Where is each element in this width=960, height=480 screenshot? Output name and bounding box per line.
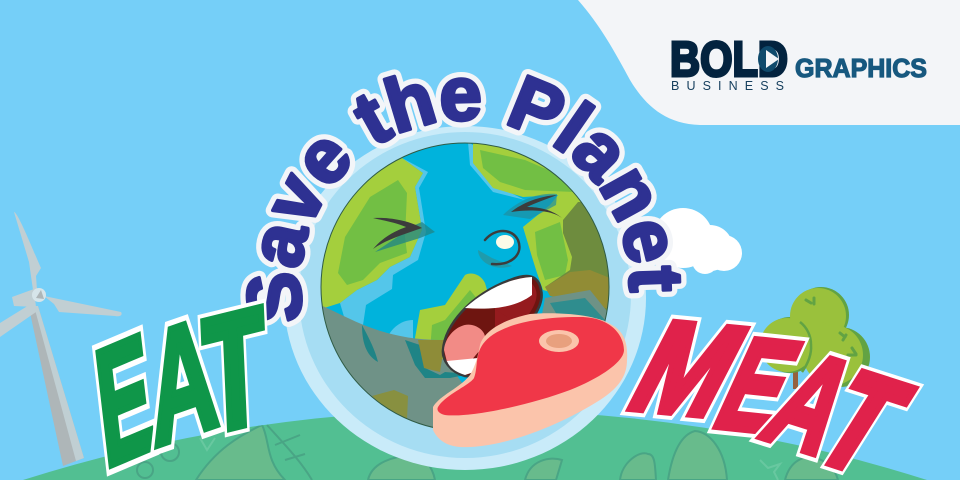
- wind turbine: [0, 212, 122, 466]
- logo: [670, 33, 927, 93]
- letter E: E: [697, 312, 819, 459]
- turbine tower: [29, 306, 84, 466]
- tongue: [444, 325, 485, 362]
- steak: [433, 313, 627, 447]
- curved title: Save the Planet: [240, 69, 687, 327]
- left eye shadow and stroke: [375, 222, 435, 252]
- bottom-left land patch: [372, 390, 408, 420]
- open mouth: [443, 276, 542, 376]
- steak side and rim: [433, 313, 627, 447]
- globe outline: [321, 143, 609, 431]
- middle land: [415, 274, 487, 360]
- curved title: Save the Planet: [246, 74, 682, 322]
- lower teeth: [447, 358, 478, 375]
- hill vegetable doodles: [137, 425, 838, 480]
- turbine hub: [32, 288, 46, 302]
- upper teeth: [465, 277, 532, 309]
- letter M: M: [608, 295, 768, 444]
- logo word: GRAPHICS: GRAPHICS: [795, 53, 927, 83]
- right eye shadow and stroke: [503, 194, 557, 219]
- letter M: M: [608, 295, 768, 444]
- steak meat: [437, 317, 624, 415]
- dazed eye: [478, 250, 512, 268]
- tree: [760, 287, 870, 389]
- polluted shadow: [322, 306, 462, 427]
- earth halo: [284, 126, 646, 470]
- ocean: [326, 144, 605, 383]
- letter T: T: [201, 275, 268, 468]
- logo word: BUSINESS: BUSINESS: [671, 79, 784, 93]
- scorched right side: [545, 202, 608, 310]
- word: EAT: [88, 275, 268, 480]
- letter T: T: [201, 275, 268, 468]
- steak bone: [539, 330, 579, 352]
- mouth upper right: [495, 305, 530, 345]
- word: MEAT: [608, 295, 932, 480]
- coast shallows: [340, 158, 428, 325]
- ground hill: [23, 410, 927, 480]
- logo word: BOLD: BOLD: [670, 33, 788, 87]
- right land: [473, 144, 580, 292]
- tree trunk: [793, 365, 798, 389]
- letter A: A: [141, 281, 224, 480]
- letter E: E: [697, 312, 819, 459]
- cloud: [653, 208, 742, 274]
- letter A: A: [741, 326, 882, 480]
- letter A: A: [141, 281, 224, 480]
- letter A: A: [741, 326, 882, 480]
- logo panel: [578, 0, 960, 125]
- left land: [322, 158, 423, 308]
- earth globe: [322, 144, 608, 427]
- turbine blades: [0, 212, 122, 337]
- logo play icon: [758, 46, 779, 72]
- tree canopy: [793, 287, 849, 343]
